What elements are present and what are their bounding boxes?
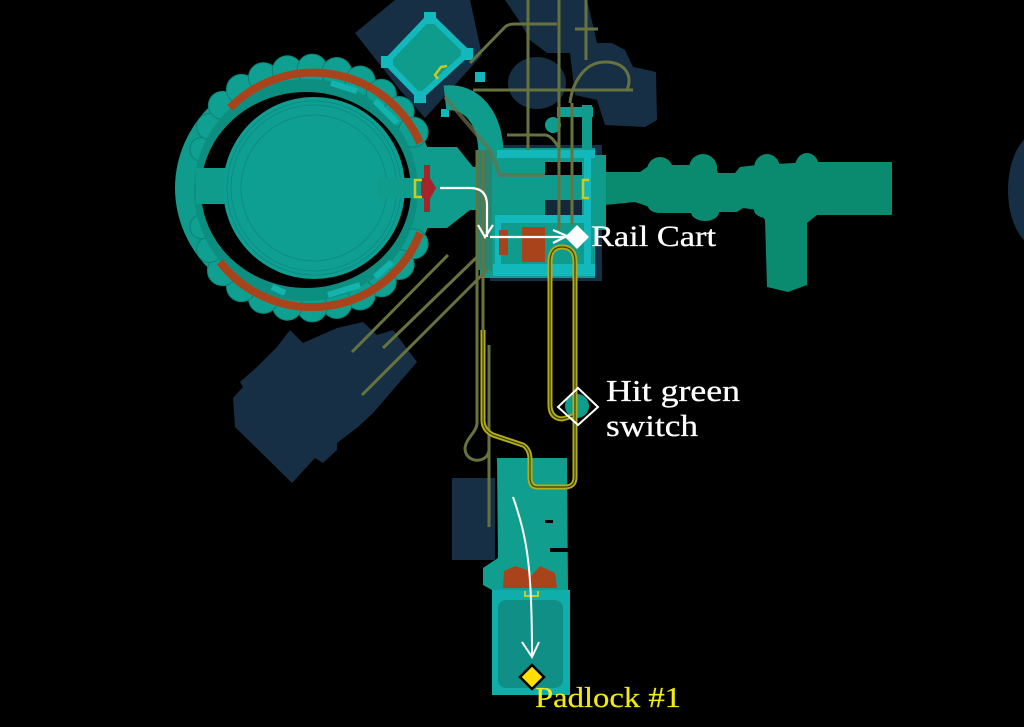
red upper arc xyxy=(230,73,420,143)
yellow bracket south xyxy=(525,591,538,596)
black ring gap xyxy=(201,92,411,288)
west bridge xyxy=(196,168,230,204)
central disc xyxy=(223,97,405,279)
icon: rail cart diamond xyxy=(565,225,589,249)
disc rings xyxy=(227,101,401,275)
cyan ring segments xyxy=(272,83,397,295)
red floor panels xyxy=(499,227,545,262)
icon: padlock diamond xyxy=(520,665,544,689)
east bridge xyxy=(378,147,495,228)
corridor to central hall xyxy=(445,98,491,152)
black holes xyxy=(545,162,582,175)
label: hit green switch xyxy=(606,373,741,443)
red south panels xyxy=(503,566,557,588)
cyan frame xyxy=(493,150,595,276)
route arrow to padlock xyxy=(513,497,539,657)
label: hit green switch: Hit green xyxy=(606,373,741,408)
black notches xyxy=(545,520,568,552)
arena scalloped bumps xyxy=(186,53,433,323)
arena outer body xyxy=(175,68,435,308)
east wing xyxy=(605,153,892,292)
west band xyxy=(478,150,492,270)
grey-olive service lines xyxy=(352,0,633,527)
label: hit green switch: switch xyxy=(606,408,699,443)
corner towers xyxy=(381,12,485,117)
central hall xyxy=(478,148,606,278)
north-east annex xyxy=(545,105,593,151)
label: padlock #1: Padlock #1 xyxy=(535,682,681,714)
yellow bracket west xyxy=(415,180,422,197)
south hall xyxy=(483,458,570,695)
yellow rail track xyxy=(483,247,575,487)
end room inner floor xyxy=(498,600,563,688)
red gate xyxy=(421,165,436,212)
route arrow to rail cart xyxy=(440,188,567,243)
icon: green switch marker xyxy=(558,388,598,425)
north-west building xyxy=(381,12,491,152)
red lower arc xyxy=(220,233,420,307)
cyan end room xyxy=(492,590,570,695)
switch disc xyxy=(565,394,589,418)
label: rail cart: Rail Cart xyxy=(591,220,717,253)
circular arena xyxy=(175,53,495,323)
yellow bracket east xyxy=(583,180,589,198)
yellow bracket north-west xyxy=(435,66,447,79)
dark unexplored areas xyxy=(233,0,1024,560)
inner dark band xyxy=(194,79,418,301)
